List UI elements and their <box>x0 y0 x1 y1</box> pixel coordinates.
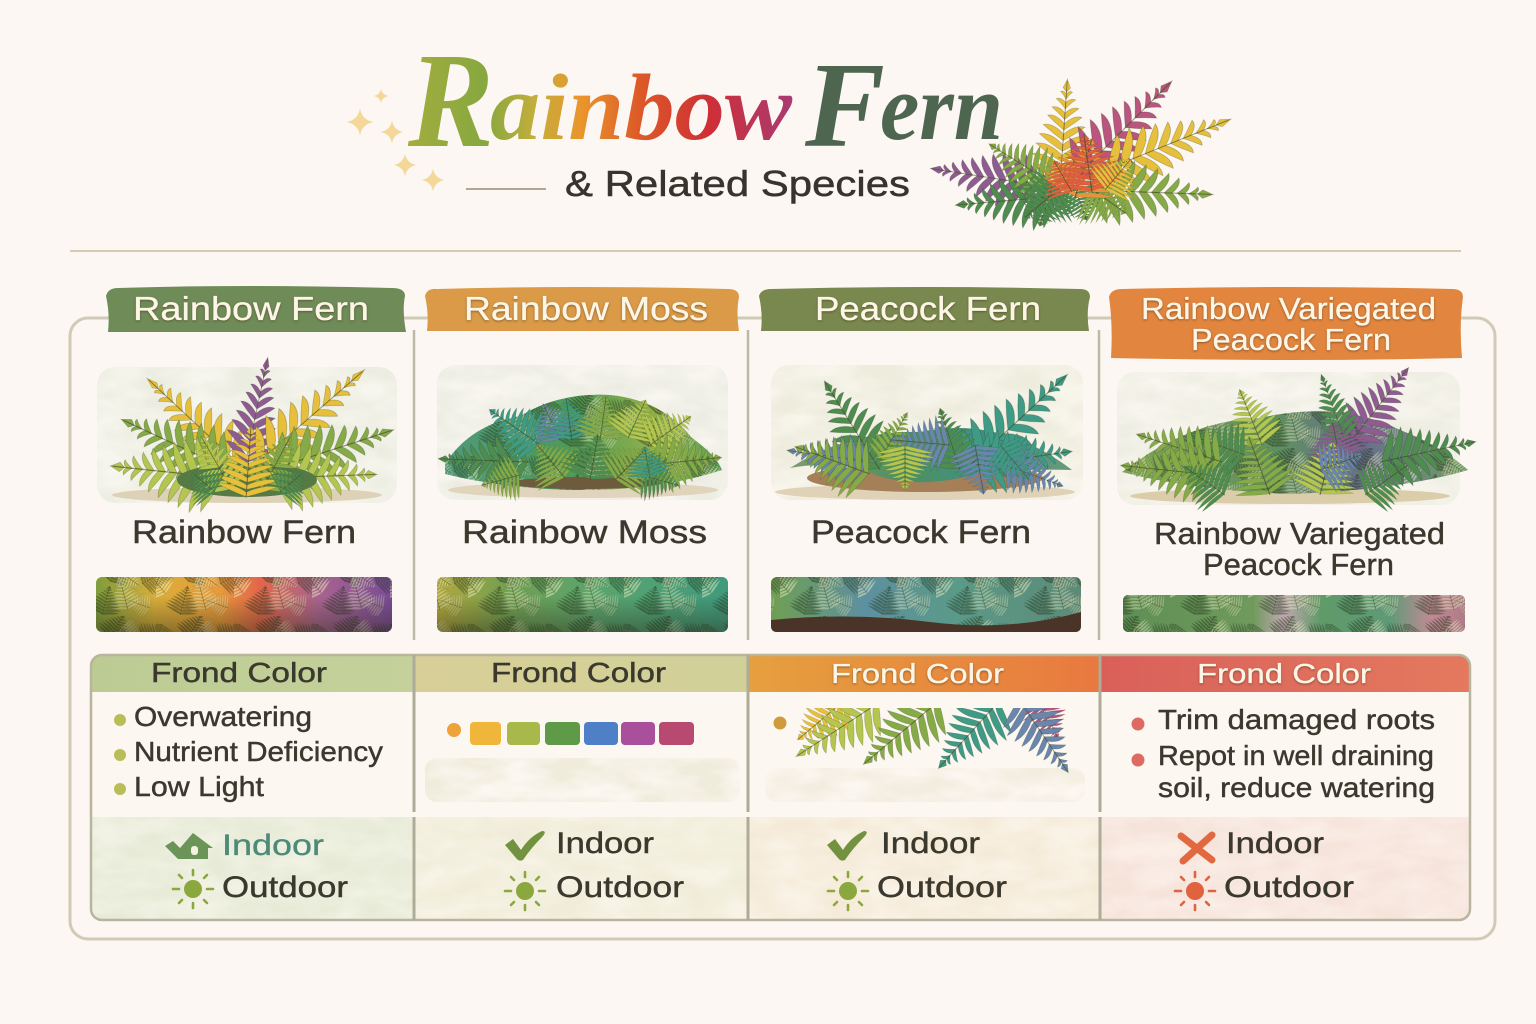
illustration: title fern bouquet <box>926 57 1242 244</box>
indoor text: Indoor <box>556 827 654 860</box>
swatch strip: Variegated colors <box>1123 595 1465 632</box>
panel: comparison frame <box>70 318 1495 939</box>
label: Rainbow Variegated Peacock Fern: Rainbow Variegated <box>1154 516 1445 551</box>
swatch strip: Peacock Fern colors <box>771 577 1081 632</box>
list: remedies: Trim damaged roots <box>1158 704 1435 735</box>
list: remedies: Repot in well draining <box>1158 740 1434 771</box>
divider under title <box>70 250 1461 252</box>
outdoor text: Outdoor <box>1224 871 1354 904</box>
icon: sparkles <box>346 88 444 192</box>
icon: sun <box>173 870 213 908</box>
row: Frond Color headers: Frond Color <box>491 657 666 688</box>
row: Frond Color headers: Frond Color <box>1197 658 1371 689</box>
tab: Rainbow Moss: Rainbow Moss <box>464 290 708 327</box>
table column lines <box>414 655 1100 920</box>
growing: Peacock Fern <box>827 827 1007 910</box>
tab: Peacock Fern: Peacock Fern <box>815 290 1041 327</box>
indoor text: Indoor <box>222 829 324 862</box>
icon: cross <box>1181 835 1212 861</box>
icon: sun <box>1175 872 1215 910</box>
table frame <box>91 655 1470 920</box>
label: Rainbow Variegated Peacock Fern: Peacock Fern <box>1203 547 1394 582</box>
title: Rainbow Fern <box>407 26 1003 176</box>
illustration: peacock frond color range <box>774 708 1069 774</box>
tab: Peacock Fern <box>759 287 1090 331</box>
indoor text: Indoor <box>881 827 980 860</box>
label: Rainbow Moss: Rainbow Moss <box>462 514 707 550</box>
list: problems <box>114 701 383 802</box>
icon: check <box>827 831 867 861</box>
tab: Rainbow Variegated Peacock Fern: Rainbow Variegated <box>1141 291 1436 326</box>
swatches: frond color palette <box>447 722 694 745</box>
swatch strip: Rainbow Moss colors <box>437 577 728 632</box>
illustration: rainbow fern plant <box>97 347 404 516</box>
illustration: rainbow variegated peacock fern plant <box>1117 350 1482 518</box>
growing: Rainbow Fern <box>165 829 348 908</box>
tab: Rainbow Fern: Rainbow Fern <box>133 290 369 327</box>
tab: Rainbow Variegated Peacock Fern: Peacock Fern <box>1191 322 1391 357</box>
indoor text: Indoor <box>1226 827 1324 860</box>
illustration: rainbow moss plant <box>437 365 728 509</box>
icon: sun <box>505 872 545 910</box>
icon: sun <box>828 872 868 910</box>
list: problems: Nutrient Deficiency <box>134 736 383 767</box>
outdoor text: Outdoor <box>877 871 1007 904</box>
row: Frond Color headers: Frond Color <box>151 657 327 688</box>
panel: care table <box>91 655 1470 920</box>
outdoor text: Outdoor <box>556 871 684 904</box>
icon: house check <box>165 833 213 859</box>
label: Rainbow Fern: Rainbow Fern <box>132 514 356 550</box>
title block <box>346 26 1242 244</box>
subtitle rule <box>466 188 546 190</box>
growing: Rainbow Variegated Peacock Fern <box>1175 827 1354 910</box>
row: Frond Color headers <box>151 657 1371 689</box>
icon: check <box>505 831 545 861</box>
table background <box>91 655 1470 920</box>
list: remedies <box>1132 704 1435 803</box>
illustration: peacock fern plant <box>771 350 1091 509</box>
tab: Rainbow Fern <box>106 286 406 332</box>
tab: Rainbow Variegated Peacock Fern <box>1109 287 1463 360</box>
swatch strip: Rainbow Fern colors <box>96 577 392 632</box>
row: Frond Color headers: Frond Color <box>831 658 1004 689</box>
label: Peacock Fern: Peacock Fern <box>811 514 1031 550</box>
tab: Rainbow Moss <box>425 287 739 331</box>
outdoor text: Outdoor <box>222 871 348 904</box>
list: problems: Low Light <box>134 771 264 802</box>
column dividers <box>414 330 1099 640</box>
list: remedies: soil, reduce watering <box>1158 772 1435 803</box>
growing: Rainbow Moss <box>505 827 684 910</box>
label: Rainbow Variegated Peacock Fern <box>1154 516 1445 582</box>
title: Rainbow Fern: F <box>804 38 885 173</box>
list: problems: Overwatering <box>134 701 312 732</box>
title: Rainbow Fern: ern <box>880 56 1003 160</box>
title: Rainbow Fern: R <box>407 26 494 176</box>
subtitle: & Related Species <box>565 163 910 204</box>
title: Rainbow Fern: ainbow <box>490 56 793 160</box>
